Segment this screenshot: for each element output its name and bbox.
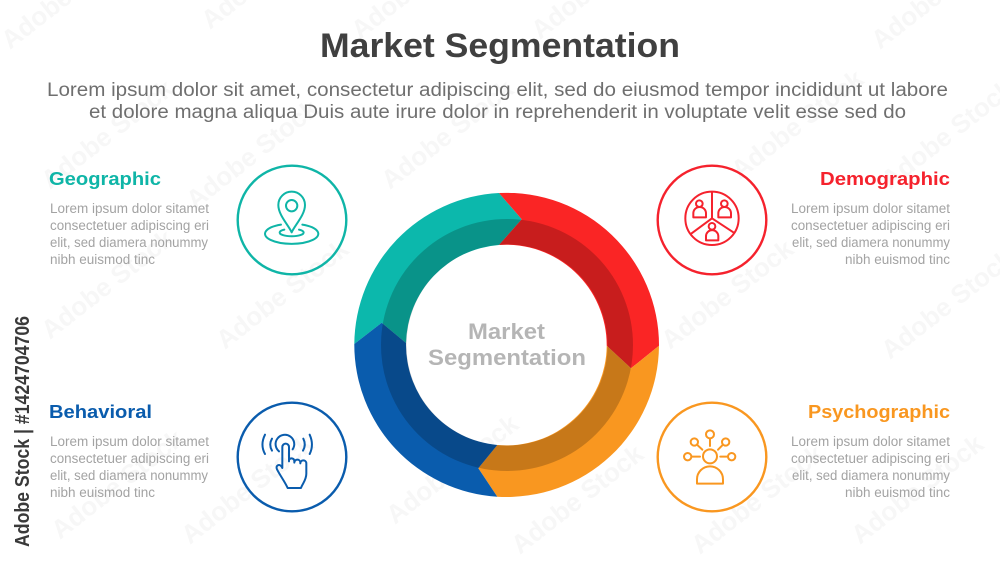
text: Adobe Stock [35,223,179,345]
text: Adobe Stock [725,63,869,185]
heading: demographic: Demographic [820,169,950,189]
text block: geographic: Lorem ipsum dolor sitamet [50,201,209,216]
text: Adobe Stock [685,438,829,560]
text block: demographic: elit, sed diamera nonummy [792,235,950,250]
panel: psychographic [658,402,950,511]
text: Adobe Stock [505,438,649,560]
subtitle text: et dolore magna aliqua Duis aute irure dolor in reprehenderit in voluptate velit esse sed do [89,102,906,123]
heading: behavioral: Behavioral [49,402,152,422]
text block: behavioral [50,434,209,500]
text block: geographic [50,201,209,267]
text: Adobe Stock [380,408,524,530]
heading: geographic: Geographic [49,169,161,189]
icon: people pie in circle [658,166,766,274]
text block: psychographic: Lorem ipsum dolor sitamet [791,434,950,449]
text block: demographic: consectetuer adipiscing eri [791,218,950,233]
ring segment: behavioral [354,323,497,497]
text block: geographic: nibh euismod tinc [50,252,155,267]
text block: psychographic: nibh euismod tinc [845,485,950,500]
text block: psychographic: elit, sed diamera nonummy [792,468,950,483]
ring segment: psychographic [478,346,659,497]
text: Adobe Stock [180,93,324,215]
icon: tapping hand in circle [238,403,346,511]
text block: behavioral: nibh euismod tinc [50,485,155,500]
segmented ring chart [354,193,659,497]
text: Adobe Stock [175,428,319,550]
panel: demographic [658,166,950,274]
text block: psychographic: consectetuer adipiscing eri [791,451,950,466]
text block: psychographic [791,434,950,500]
stock credit vertical text: Adobe Stock | #1424704706 [12,316,34,547]
text: Adobe Stock [35,73,179,195]
ring segment: demographic [499,193,659,368]
text block: demographic [791,201,950,267]
ring segment: geographic [354,193,522,344]
text: Adobe Stock [45,423,189,545]
text: Adobe Stock [375,73,519,195]
inner dark ring shade [394,232,620,458]
center label [428,319,586,370]
icon: person network in circle [658,403,766,511]
text: Adobe Stock [210,233,354,355]
center label: Segmentation [428,345,586,370]
text block: demographic: Lorem ipsum dolor sitamet [791,201,950,216]
panel: behavioral [49,402,346,511]
text: Adobe Stock [655,233,799,355]
text block: behavioral: Lorem ipsum dolor sitamet [50,434,209,449]
panel: geographic [49,166,346,274]
subtitle text [47,80,948,123]
center label: Market [468,319,546,344]
text: Adobe Stock [845,428,989,550]
icon: location pin in circle [238,166,346,274]
heading: psychographic: Psychographic [808,402,950,422]
title: Market Segmentation [320,27,680,65]
text block: behavioral: consectetuer adipiscing eri [50,451,209,466]
text block: geographic: elit, sed diamera nonummy [50,235,208,250]
text block: geographic: consectetuer adipiscing eri [50,218,209,233]
text block: demographic: nibh euismod tinc [845,252,950,267]
text block: behavioral: elit, sed diamera nonummy [50,468,208,483]
subtitle text: Lorem ipsum dolor sit amet, consectetur adipiscing elit, sed do eiusmod tempor incididunt ut labore [47,80,948,101]
